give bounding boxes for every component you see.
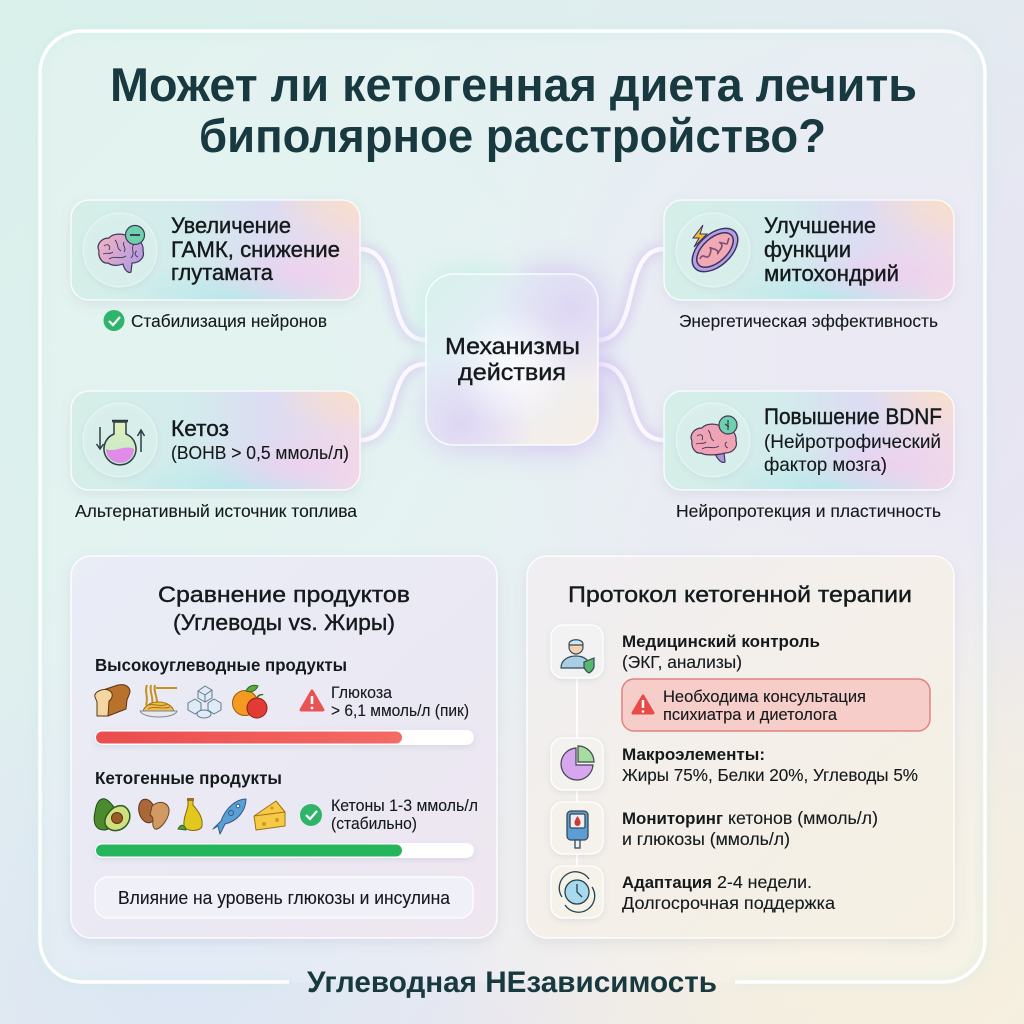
step: macros (551, 738, 918, 790)
icon: mitochondrion (684, 220, 746, 280)
card: GABA: глутамата (171, 260, 274, 285)
step: macros: Макроэлементы: (622, 745, 765, 764)
card: mitochondria: митохондрий (764, 261, 899, 286)
icons: keto foods (94, 797, 285, 834)
card: BDNF: фактор мозга) (764, 454, 887, 476)
icon: doctor (561, 640, 594, 673)
subheading: keto: Кетогенные продукты (95, 768, 282, 788)
icons: high-carb foods (95, 685, 267, 718)
heading: food comparison: Сравнение продуктов (158, 582, 410, 607)
card: GABA: Увеличение (171, 213, 291, 238)
title: биполярное расстройство? (199, 109, 826, 162)
bar: ketones (95, 843, 474, 858)
panel: food comparison (71, 556, 497, 938)
card: BDNF: (Нейротрофический (764, 431, 941, 453)
card: ketosis: Кетоз (171, 416, 229, 441)
label: neuroprotection: Нейропротекция и пластичность (676, 501, 941, 521)
ketones status: (стабильно) (331, 815, 417, 833)
card: mitochondria: Улучшение (764, 213, 876, 238)
card: mitochondria (664, 200, 954, 300)
footer: Углеводная НЕзависимость (307, 966, 717, 999)
note: glucose and insulin: Влияние на уровень глюкозы и инсулина (118, 888, 451, 908)
card: GABA: ГАМК, снижение (171, 237, 340, 262)
card: GABA (71, 200, 360, 300)
glucose warning: Глюкоза (331, 684, 393, 702)
alert: consultation (622, 679, 930, 731)
step: medical control (551, 625, 820, 678)
timeline (576, 678, 578, 866)
alert: consultation: психиатра и диетолога (663, 706, 838, 724)
icon: glucose meter (567, 811, 588, 848)
step: adaptation (551, 866, 835, 918)
heading: food comparison: (Углеводы vs. Жиры) (173, 610, 395, 635)
bar: glucose (95, 730, 474, 745)
label: alternative fuel: Альтернативный источник топлива (75, 501, 357, 521)
icon: flask with arrows (96, 421, 144, 465)
step: monitoring: и глюкозы (ммоль/л) (622, 829, 790, 849)
label: stabilization: Стабилизация нейронов (131, 311, 327, 331)
title (110, 58, 917, 162)
step: adaptation: Долгосрочная поддержка (622, 893, 835, 913)
card: BDNF: Повышение BDNF (764, 404, 942, 429)
heading: protocol: Протокол кетогенной терапии (568, 582, 912, 607)
icon: brain with leaf (691, 416, 737, 462)
note: glucose and insulin (95, 877, 473, 918)
step: monitoring (551, 802, 878, 854)
step: adaptation: 2-4 недели. (717, 872, 812, 892)
step: macros: Жиры 75%, Белки 20%, Углеводы 5% (622, 765, 918, 785)
step: adaptation: Адаптация (622, 873, 712, 892)
card: ketosis (71, 391, 360, 490)
glucose warning: > 6,1 ммоль/л (пик) (331, 702, 469, 720)
card: mitochondria: функции (764, 237, 851, 262)
heading: food comparison (158, 582, 410, 635)
card: ketosis: (BOHB > 0,5 ммоль/л) (171, 443, 349, 463)
center node: mechanisms: действия (458, 359, 566, 385)
card: BDNF (664, 391, 954, 490)
connectors (360, 249, 664, 440)
ketones status (300, 797, 478, 833)
title: Может ли кетогенная диета лечить (110, 58, 917, 111)
center node: mechanisms (425, 268, 604, 452)
panel: protocol (527, 556, 954, 938)
step: monitoring: кетонов (ммоль/л) (728, 808, 878, 828)
step: monitoring: Мониторинг (622, 809, 723, 828)
subheading: high-carb: Высокоуглеводные продукты (95, 655, 347, 675)
step: medical control: (ЭКГ, анализы) (622, 652, 742, 672)
glucose warning (301, 684, 469, 720)
icon: clock (559, 872, 595, 912)
label: energy efficiency: Энергетическая эффективность (679, 311, 938, 331)
icon: brain with minus (98, 226, 144, 272)
center node: mechanisms: Механизмы (445, 333, 580, 359)
alert: consultation: Необходима консультация (663, 688, 866, 706)
icon: pie chart (561, 746, 594, 780)
ketones status: Кетоны 1-3 ммоль/л (331, 797, 478, 815)
step: medical control: Медицинский контроль (622, 632, 820, 651)
